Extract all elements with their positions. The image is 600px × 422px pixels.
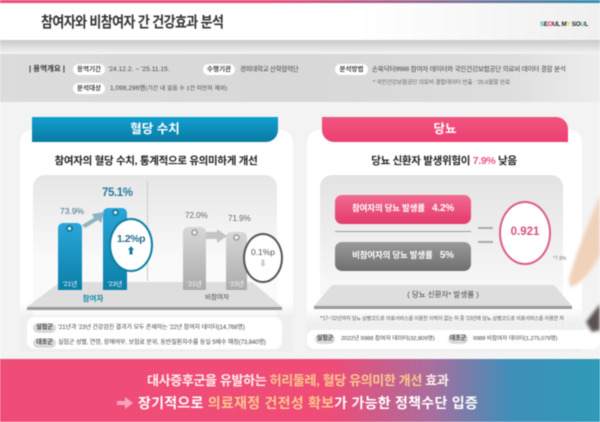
note: control group	[33, 338, 56, 348]
overview: method	[335, 64, 368, 75]
bar: participants 2021: '21년	[63, 281, 77, 288]
panel subheading: 당뇨 신환자 발생위험이 7.9% 낮음	[371, 155, 517, 167]
platform	[26, 282, 282, 310]
panel subheading: 참여자의 혈당 수치, 통계적으로 유의미하게 개선	[55, 155, 257, 167]
notes box: 9988 비참여자 데이터(1,275,079명)	[473, 336, 557, 342]
callout: ratio 0.921: 0.921	[511, 226, 539, 238]
dot	[191, 229, 198, 236]
footnote: *'17~'22년까지 당뇨 상병코드로 의료서비스를 이용한 이력이 없는 자 중 '23년에 당뇨 상병코드로 의료서비스를 이용한 자	[320, 316, 564, 322]
note: experimental group: 실험군	[317, 336, 333, 342]
title: 참여자와 비참여자 간 건강효과 분석	[41, 14, 223, 31]
value 72.0%: 72.0%	[185, 211, 208, 220]
footer line 1: 대사증후군을 유발하는 허리둘레, 혈당 유의미한 개선 효과	[147, 373, 448, 388]
notes box: '21년과 '23년 건강검진 결과가 모두 존재하는 '22년 참여자 데이터(14,768명)	[58, 325, 245, 331]
note: ratio footnote mark: *7.9%	[553, 256, 566, 262]
label: non-participants: 비참여자	[205, 294, 229, 301]
value 75.1%: 75.1%	[102, 187, 133, 199]
callout: -0.1%p: 0.1%p	[251, 247, 275, 257]
dot	[112, 209, 119, 216]
bar: non-participants 2023: '23년	[229, 281, 244, 288]
value 71.9%: 71.9%	[228, 214, 251, 223]
decoration: hand	[567, 196, 600, 334]
arrow	[82, 212, 104, 228]
pill: non-participant incidence	[335, 242, 471, 271]
callout: -0.1%p: ⬇	[259, 259, 267, 268]
dot	[66, 225, 73, 232]
note: control group	[448, 334, 468, 344]
panel heading: 혈당 수치	[130, 122, 180, 136]
callout: ratio 0.921	[499, 201, 551, 265]
overview: subjects: 분석대상	[77, 85, 101, 92]
panel card	[20, 130, 293, 352]
panel: blood sugar	[20, 116, 292, 348]
label: participants: 참여자	[83, 294, 103, 303]
overview label: | 용역개요 |	[29, 64, 65, 73]
inner panel	[320, 175, 563, 295]
footer banner	[0, 359, 600, 422]
project overview band	[0, 40, 600, 102]
bar: participants 2023: '23년	[108, 281, 122, 288]
project overview band: 손목닥터9988 참여자 데이터와 국민건강보험공단 의료비 데이터 결합 분석	[372, 66, 566, 73]
notes box: 실험군 성별, 연령, 장애여부, 보험료 분위, 동반질환자수를 동일 5배수 매칭(73,840명)	[58, 340, 266, 346]
label: incidence: ( 당뇨 신환자* 발생률 )	[407, 290, 479, 299]
callout: -0.1%p	[243, 233, 283, 283]
footer line 2: 장기적으로 의료재정 건전성 확보가 가능한 정책수단 입증	[138, 395, 478, 411]
project overview band: 경희대학교 산학협력단	[240, 66, 298, 73]
overview: period: 용역기간	[77, 66, 101, 73]
equals sign	[478, 227, 493, 243]
pill: non-participant incidence: 비참여자의 당뇨 발생률 5%	[352, 250, 454, 261]
pill: participant incidence	[335, 195, 471, 224]
note: experimental group	[315, 334, 335, 344]
notes box	[307, 330, 600, 349]
overview: contractor: 수행기관	[207, 66, 231, 73]
arrow	[206, 229, 227, 243]
header background	[0, 3, 600, 41]
note: control group: 대조군	[450, 336, 466, 342]
inner chart panel	[33, 175, 277, 315]
overview: contractor	[203, 64, 235, 75]
panel heading	[322, 117, 568, 142]
bar: non-participants 2021: '21년	[187, 281, 202, 288]
project overview band: '24.12.2. ~ '25.11.15.	[108, 66, 170, 73]
note: experimental group	[33, 323, 56, 333]
note: experimental group: 실험군	[36, 325, 53, 331]
top gradient bar	[0, 0, 600, 3]
logo: Seoul My Soul: SEOUL MY SOUL	[540, 21, 588, 28]
bar: non-participants 2021	[183, 227, 206, 290]
overview: method: 분석방법	[340, 66, 363, 73]
project overview band: 1,098,296명(기간 내 걸음 수 1건 미만자 제외)	[110, 85, 227, 92]
callout: +1.2%p: 1.2%p	[117, 233, 145, 245]
notes box	[27, 317, 282, 349]
platform	[314, 285, 572, 310]
divider	[335, 231, 471, 232]
icon: double arrow	[116, 396, 134, 410]
notes box: 2022년 9988 참여자 데이터(32,809명)	[341, 336, 435, 342]
callout: +1.2%p	[109, 218, 153, 272]
divider	[147, 181, 148, 281]
value 73.9%: 73.9%	[60, 206, 84, 216]
panel card	[307, 130, 582, 352]
panel: diabetes	[308, 116, 600, 348]
project overview band: * 국민건강보험공단 의료비 결합데이터 반출 : '25.6월말 완료	[373, 80, 510, 86]
panel heading	[32, 117, 278, 142]
bar: non-participants 2023	[226, 232, 247, 290]
callout: +1.2%p: ⬆	[126, 246, 136, 256]
bar: participants 2021	[58, 223, 82, 290]
bar: participants 2023	[103, 208, 127, 290]
dot	[233, 234, 240, 241]
note: control group: 대조군	[36, 340, 53, 346]
panel heading: 당뇨	[433, 122, 456, 136]
pill: participant incidence: 참여자의 당뇨 발생률 4.2%	[352, 203, 454, 214]
overview: period	[73, 64, 105, 75]
overview: subjects	[73, 83, 105, 94]
